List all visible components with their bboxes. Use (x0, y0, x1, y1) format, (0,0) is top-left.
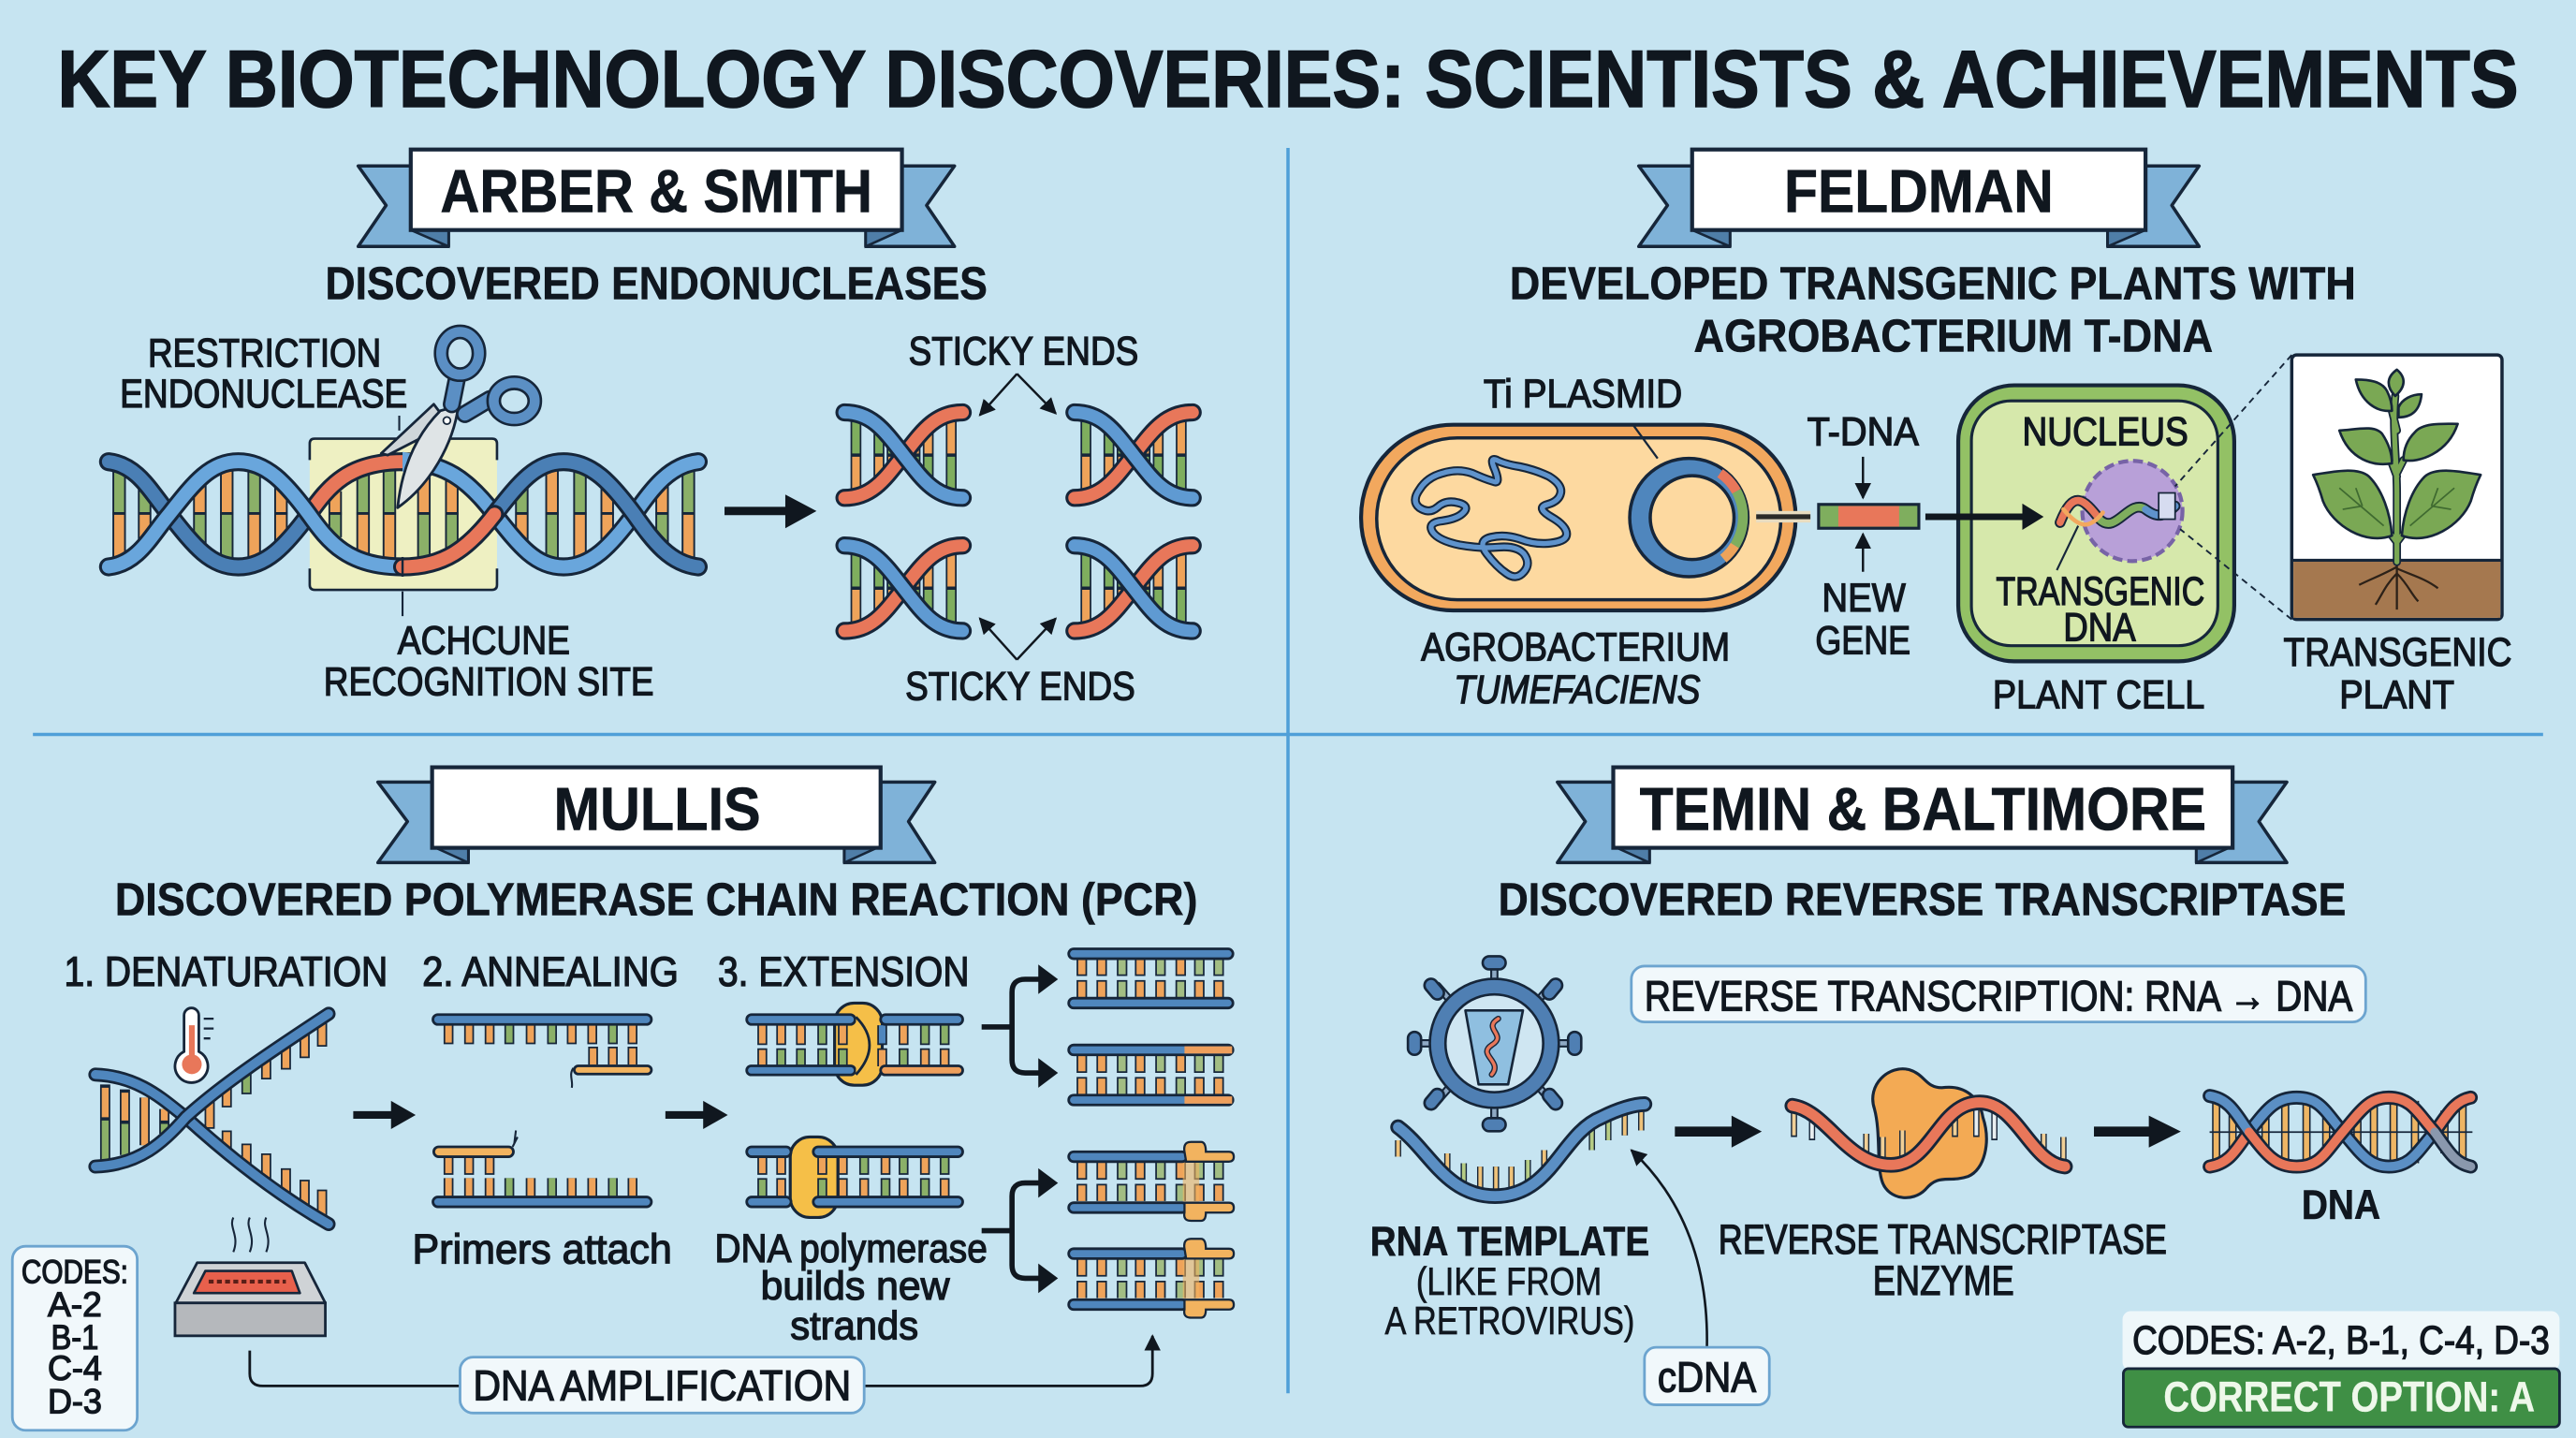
denaturing DNA (95, 1014, 329, 1224)
codes legend: CODES: (22, 1255, 128, 1291)
banner: Mullis: MULLIS (554, 774, 761, 843)
subheading: transgenic plants: DEVELOPED TRANSGENIC PLANTS WITH (1510, 258, 2356, 309)
connector: plasmid to T-DNA (1756, 511, 1810, 522)
label: recognition site: ACHCUNE (398, 619, 570, 664)
branch arrows bottom (982, 1168, 1058, 1293)
label: restriction endonuclease: RESTRICTION (148, 330, 381, 375)
subheading: discovered endonucleases: DISCOVERED ENDONUCLEASES (326, 258, 988, 309)
codes legend: D-3 (48, 1382, 102, 1420)
label: new gene with arrow: GENE (1815, 619, 1910, 664)
label: transgenic plant: PLANT (2339, 672, 2454, 717)
label: transgenic DNA (1996, 569, 2204, 650)
label: RNA template: (LIKE FROM (1416, 1259, 1602, 1303)
icon: scissors (381, 332, 534, 507)
arrow: T-DNA into nucleus (1925, 504, 2043, 530)
bacterium cell (1361, 425, 1795, 610)
banner: Temin & Baltimore (1558, 768, 2287, 862)
arrow: denaturation to annealing (353, 1101, 416, 1129)
codes legend: C-4 (48, 1349, 102, 1387)
label: DNA amplification: DNA AMPLIFICATION (474, 1361, 851, 1409)
subheading: transgenic plants: AGROBACTERIUM T-DNA (1693, 312, 2213, 362)
DNA product helix (2210, 1096, 2472, 1167)
label: sticky ends top: STICKY ENDS (909, 330, 1138, 374)
banner: Arber & Smith: ARBER & SMITH (440, 156, 872, 225)
panel: Temin & Baltimore (1370, 768, 2559, 1427)
banner: Arber & Smith (359, 150, 955, 246)
arrow: annealing to extension (666, 1101, 728, 1129)
label: DNA polymerase: builds new (761, 1264, 950, 1309)
recognition site highlight (310, 439, 497, 590)
label: Agrobacterium tumefaciens: AGROBACTERIUM (1421, 625, 1730, 670)
label: reverse transcriptase enzyme (1719, 1216, 2167, 1304)
transgenic plant box (2291, 355, 2502, 620)
label: transgenic DNA: TRANSGENIC (1996, 569, 2204, 614)
label: RNA template (1370, 1218, 1649, 1343)
subheading: PCR: DISCOVERED POLYMERASE CHAIN REACTION (PCR) (115, 875, 1197, 926)
arrow: cDNA leader (1632, 1151, 1707, 1347)
arrow: cutting to fragments (724, 494, 816, 528)
enzyme with RNA (1793, 1069, 2065, 1197)
transgenic DNA squiggle (2060, 493, 2175, 524)
label: T-DNA with arrow: T-DNA (1808, 410, 1919, 455)
label: Agrobacterium tumefaciens: TUMEFACIENS (1454, 668, 1701, 712)
branch arrows top (982, 964, 1058, 1088)
plant (2313, 370, 2481, 609)
label: DNA polymerase (714, 1226, 988, 1348)
codes legend (12, 1246, 138, 1431)
label: cDNA: cDNA (1658, 1354, 1757, 1401)
plasmid ring (1630, 459, 1748, 577)
banner: Temin & Baltimore: TEMIN & BALTIMORE (1640, 774, 2206, 843)
nucleus (2083, 461, 2183, 561)
subheading: transgenic plants (1510, 258, 2356, 362)
label: transgenic plant (2284, 630, 2511, 717)
subheading: reverse transcriptase: DISCOVERED REVERSE TRANSCRIPTASE (1499, 875, 2346, 926)
extension: top with polymerase (747, 1003, 963, 1085)
icon: heat block (175, 1263, 326, 1336)
codes legend: A-2 (48, 1285, 102, 1324)
step headings: 3. EXTENSION (718, 948, 970, 995)
label: DNA: DNA (2302, 1181, 2380, 1228)
label: reverse transcriptase enzyme: REVERSE TRANSCRIPTASE (1719, 1216, 2167, 1263)
label: sticky ends bottom: STICKY ENDS (905, 665, 1135, 710)
connector: amplification (250, 1336, 1152, 1386)
label: restriction endonuclease: ENDONUCLEASE (120, 372, 407, 417)
plant cell (1958, 386, 2234, 661)
label: RNA template: RNA TEMPLATE (1370, 1218, 1649, 1265)
DNA fragments (844, 413, 1193, 631)
banner: Feldman: FELDMAN (1784, 156, 2054, 225)
annealing: top strand with primer (433, 1015, 651, 1088)
extension: bottom with polymerase (747, 1137, 963, 1217)
step headings: 2. ANNEALING (422, 948, 679, 995)
step headings (65, 948, 970, 995)
label: DNA polymerase: DNA polymerase (714, 1226, 988, 1271)
label: reverse transcriptase enzyme: ENZYME (1873, 1257, 2014, 1304)
label: transgenic DNA: DNA (2063, 605, 2136, 650)
sticky end arrows bottom (980, 619, 1056, 660)
codes legend: B-1 (51, 1318, 98, 1357)
panel: Mullis (12, 768, 1234, 1431)
label: recognition site (324, 619, 654, 704)
label: T-DNA with arrow (1808, 410, 1919, 498)
label: new gene with arrow: NEW (1822, 576, 1906, 621)
icon: thermometer (175, 1008, 213, 1082)
callout: reverse transcription: REVERSE TRANSCRIPTION: RNA → DNA (1645, 972, 2353, 1020)
panel: Feldman (1361, 150, 2511, 717)
label: transgenic plant: TRANSGENIC (2284, 630, 2511, 675)
diagram: main DNA helix (109, 452, 698, 577)
icon: retrovirus (1408, 956, 1581, 1131)
panel: Arber & Smith (109, 150, 1193, 710)
arrow: enzyme to DNA (2094, 1116, 2181, 1148)
banner: Feldman (1639, 150, 2199, 246)
label: primers attach: Primers attach (413, 1226, 672, 1273)
label: DNA polymerase: strands (790, 1303, 918, 1348)
label: recognition site: RECOGNITION SITE (324, 659, 654, 704)
sticky end arrows top (980, 374, 1056, 415)
annealing: bottom strand with primer (433, 1130, 651, 1207)
label: Agrobacterium tumefaciens (1421, 625, 1730, 712)
label: Ti plasmid: Ti PLASMID (1484, 372, 1682, 417)
chromosome tangle (1415, 460, 1567, 577)
banner: Mullis (378, 768, 935, 862)
icon: steam (232, 1217, 269, 1252)
label: plant cell: PLANT CELL (1993, 672, 2204, 717)
step headings: 1. DENATURATION (65, 948, 388, 995)
amplified products (1069, 949, 1234, 1318)
RNA template strand (1398, 1104, 1645, 1196)
T-DNA segment (1819, 505, 1919, 528)
label: new gene with arrow (1815, 534, 1910, 664)
label: nucleus: NUCLEUS (2022, 410, 2188, 455)
arrow: RNA to enzyme (1675, 1116, 1762, 1148)
label: RNA template: A RETROVIRUS) (1385, 1299, 1634, 1343)
label: restriction endonuclease (120, 330, 407, 417)
